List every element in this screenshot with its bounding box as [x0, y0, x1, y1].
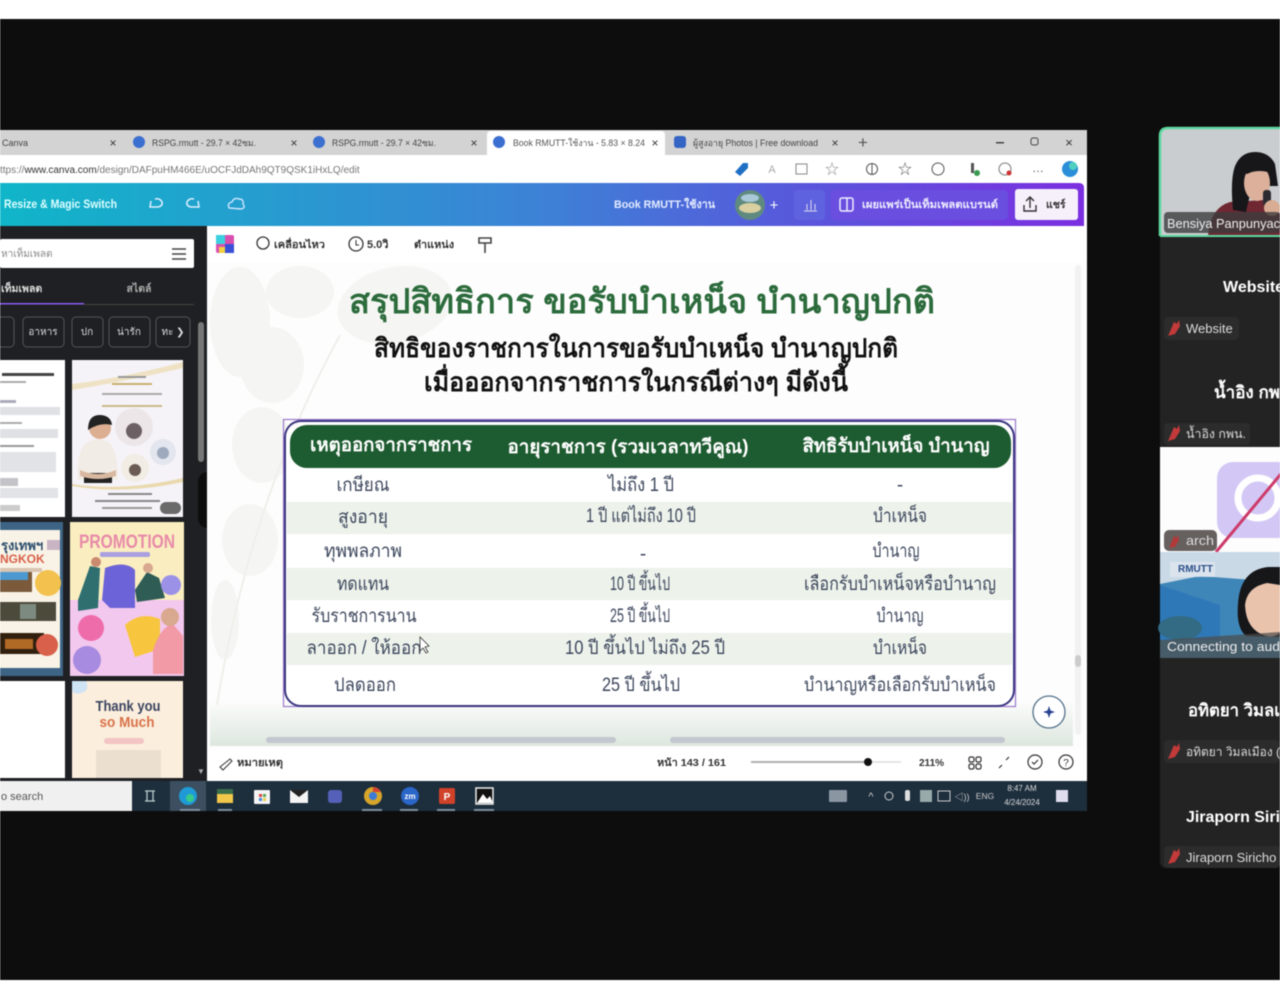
- row: ทุพพลภาพ: -: [640, 544, 646, 565]
- scrollbar: [266, 737, 1005, 743]
- editor toolbar: 5.0วิ: [367, 238, 388, 251]
- windows taskbar: 4/24/2024: [1004, 798, 1040, 807]
- row: เกษียณ: [336, 474, 903, 496]
- tile: อทิตยา วิมลเมือง: [1164, 701, 1280, 763]
- editor footer: หมายเหตุ: [237, 758, 283, 769]
- slide subtitle: [374, 332, 898, 397]
- tile: Jiraporn Sirichot: Jiraporn Siricho: [1186, 850, 1276, 865]
- tile: Website: Website: [1186, 321, 1233, 336]
- row: ทุพพลภาพ: [324, 541, 920, 565]
- browser tab strip: ×: [1065, 135, 1073, 150]
- browser tab strip: ×: [290, 136, 298, 150]
- windows taskbar: zm: [404, 792, 416, 801]
- left template sidebar: ปก: [81, 327, 93, 338]
- left template sidebar: ▼: [197, 767, 205, 776]
- slide subtitle: เมื่อออกจากราชการในกรณีต่างๆ มีดังนี้: [424, 362, 849, 397]
- share button: [1015, 189, 1078, 220]
- table row bands: [287, 502, 1012, 665]
- benefits table: [284, 420, 1016, 706]
- icon: magic assistant button: [1033, 696, 1065, 728]
- editor toolbar: [207, 226, 1085, 262]
- table header: สิทธิรับบำเหน็จ บำนาญ: [802, 433, 990, 457]
- editor toolbar: เคลื่อนไหว: [274, 237, 325, 251]
- browser tab strip: ×: [651, 136, 659, 150]
- browser tab strip: ×: [831, 136, 839, 150]
- template thumbnail: Bangkok travel: [0, 522, 63, 676]
- row: ปลดออก: บำนาญหรือเลือกรับบำเหน็จ: [804, 672, 996, 696]
- template thumbnail: woman portrait: [72, 360, 183, 517]
- address bar: …: [1032, 161, 1044, 175]
- tile: arch with muted camera logo: [1160, 447, 1280, 552]
- editor footer: [207, 750, 1085, 780]
- panel: zoom participants: [1158, 128, 1280, 868]
- tile: arch with muted camera logo: arch: [1186, 533, 1214, 548]
- table header: [290, 425, 1011, 468]
- row: รับราชการนาน: รับราชการนาน: [312, 606, 417, 627]
- browser tab strip: +: [858, 133, 868, 152]
- row: ลาออก / ให้ออก: [306, 634, 927, 659]
- tile: Connecting to audio: [1158, 552, 1280, 658]
- tile: Bensiya Panpunyachat (active speaker): [1160, 128, 1280, 236]
- address bar: A: [768, 164, 776, 176]
- left template sidebar: สไตล์: [127, 282, 151, 295]
- editor toolbar: ตำแหน่ง: [414, 239, 454, 251]
- row: สูงอายุ: บำเหน็จ: [873, 503, 927, 527]
- slide subtitle: สิทธิของราชการในการขอรับบำเหน็จ บำนาญปกติ: [374, 332, 898, 364]
- slide title: สรุปสิทธิการ ขอรับบำเหน็จ บำนาญปกติ: [349, 280, 935, 323]
- template thumbnail: thank you: [72, 681, 183, 778]
- address bar: ☆: [898, 161, 912, 177]
- address bar: [0, 155, 1087, 183]
- row: ปลดออก: 25 ปี ขึ้นไป: [602, 671, 680, 696]
- row: เกษียณ: เกษียณ: [336, 474, 390, 496]
- tile: น้ำอิง กพน.: น้ำอิง กพ: [1214, 379, 1280, 402]
- template thumbnail: blank: [0, 681, 65, 778]
- browser tab strip: Canva: [2, 138, 28, 148]
- row: ลาออก / ให้ออก: ลาออก / ให้ออก: [306, 637, 422, 659]
- canva header bar: Resize & Magic Switch: [4, 199, 117, 211]
- browser tab strip: ×: [470, 136, 478, 150]
- row: ลาออก / ให้ออก: 10 ปี ขึ้นไป ไม่ถึง 25 ปี: [565, 634, 725, 659]
- row: รับราชการนาน: 25 ปี ขึ้นไป: [610, 602, 670, 627]
- browser window: screen share: [0, 130, 1087, 811]
- address bar: ☆: [825, 161, 839, 177]
- editor footer: 211%: [919, 758, 944, 769]
- canva header bar: เผยแพร่เป็นเท็มเพลตแบรนด์: [862, 197, 998, 211]
- tile: Connecting to audio: RMUTT: [1178, 564, 1213, 575]
- tile: Website: [1164, 279, 1280, 340]
- browser tab strip: RSPG.rmutt - 29.7 × 42ซม.: [152, 138, 256, 148]
- left template sidebar: ทะ ❯: [161, 327, 185, 338]
- canva header bar: Book RMUTT-ใช้งาน: [614, 197, 715, 211]
- row: ทดแทน: 10 ปี ขึ้นไป: [610, 570, 670, 595]
- left template sidebar: อาหาร: [28, 327, 58, 338]
- template thumbnail: document: [0, 360, 65, 517]
- row: สูงอายุ: สูงอายุ: [338, 507, 388, 529]
- icon: mouse cursor: [420, 637, 429, 653]
- tile: Bensiya Panpunyachat (active speaker): Bensiya Panpunyac: [1167, 216, 1280, 231]
- share button: แชร์: [1046, 198, 1066, 211]
- windows taskbar: 8:47 AM: [1007, 784, 1037, 793]
- canva header bar: [0, 183, 1084, 226]
- row: เกษียณ: -: [897, 475, 903, 496]
- row: รับราชการนาน: บำนาญ: [876, 606, 924, 627]
- browser tab strip: Book RMUTT-ใช้งาน - 5.83 × 8.24: [513, 138, 645, 148]
- template thumbnail: thank you: Thank you: [96, 698, 160, 715]
- browser tab strip: [0, 130, 1087, 155]
- windows taskbar: ENG: [976, 791, 994, 801]
- row: เกษียณ: ไม่ถึง 1 ปี: [606, 474, 674, 496]
- template thumbnail: promotion: PROMOTION: [79, 532, 175, 553]
- canvas area: [207, 256, 1085, 752]
- address bar: ttps://www.canva.com/design/DAFpuHM466E/uOCFJdDAh9QT9QSK1iHxLQ/edit: [0, 165, 360, 176]
- editor footer: หน้า 143 / 161: [657, 757, 726, 769]
- row: สูงอายุ: [338, 503, 927, 529]
- left template sidebar: น่ารัก: [117, 327, 141, 338]
- browser tab strip: ผู้สูงอายุ Photos | Free download: [693, 138, 818, 149]
- row: ทุพพลภาพ: บำนาญ: [872, 541, 920, 562]
- tile: Jiraporn Sirichot: Jiraporn Siri: [1186, 809, 1280, 826]
- template thumbnail: Bangkok travel: รุงเทพฯ: [1, 538, 43, 554]
- table header: อายุราชการ (รวมเวลาทวีคูณ): [508, 436, 748, 459]
- template thumbnail: Bangkok travel: NGKOK: [0, 552, 45, 566]
- canva header bar: +: [770, 197, 779, 214]
- tile: น้ำอิง กพน.: น้ำอิง กพน.: [1186, 425, 1246, 441]
- decorative leaves: [210, 256, 460, 660]
- tile: Connecting to audio: Connecting to aud: [1167, 639, 1280, 654]
- tile: Jiraporn Sirichot: [1164, 809, 1280, 868]
- editor footer: ?: [1063, 758, 1069, 769]
- left template sidebar: [0, 226, 207, 781]
- row: ทดแทน: [337, 570, 996, 595]
- template thumbnail: thank you: so Much: [100, 714, 154, 731]
- windows taskbar: o search: [1, 791, 43, 803]
- row: ทดแทน: ทดแทน: [337, 574, 389, 595]
- template thumbnail: promotion: [70, 522, 184, 676]
- windows taskbar: ◁)): [954, 792, 970, 802]
- table header: เหตุออกจากราชการ: [310, 435, 473, 457]
- left template sidebar: หาเท็มเพลต: [1, 246, 52, 260]
- row: สูงอายุ: 1 ปี แต่ไม่ถึง 10 ปี: [586, 505, 696, 527]
- row: ปลดออก: ปลดออก: [334, 675, 396, 696]
- row: ทุพพลภาพ: ทุพพลภาพ: [324, 541, 402, 563]
- left template sidebar: เท็มเพลต: [1, 281, 42, 295]
- browser tab strip: ×: [109, 136, 117, 150]
- row: รับราชการนาน: [312, 602, 924, 627]
- row: ปลดออก: [334, 671, 996, 696]
- row: ทดแทน: เลือกรับบำเหน็จหรือบำนาญ: [804, 571, 996, 595]
- tile: อทิตยา วิมลเมือง: อทิตยา วิมลเมือง (: [1186, 745, 1280, 759]
- tile: อทิตยา วิมลเมือง: อทิตยา วิมลเ: [1188, 701, 1280, 720]
- row: ลาออก / ให้ออก: บำเหน็จ: [873, 635, 927, 659]
- windows taskbar: [0, 781, 1087, 811]
- windows taskbar: ^: [868, 791, 874, 803]
- windows taskbar: P: [444, 792, 451, 803]
- tile: น้ำอิง กพน.: [1164, 379, 1280, 445]
- browser tab strip: RSPG.rmutt - 29.7 × 42ซม.: [332, 138, 436, 148]
